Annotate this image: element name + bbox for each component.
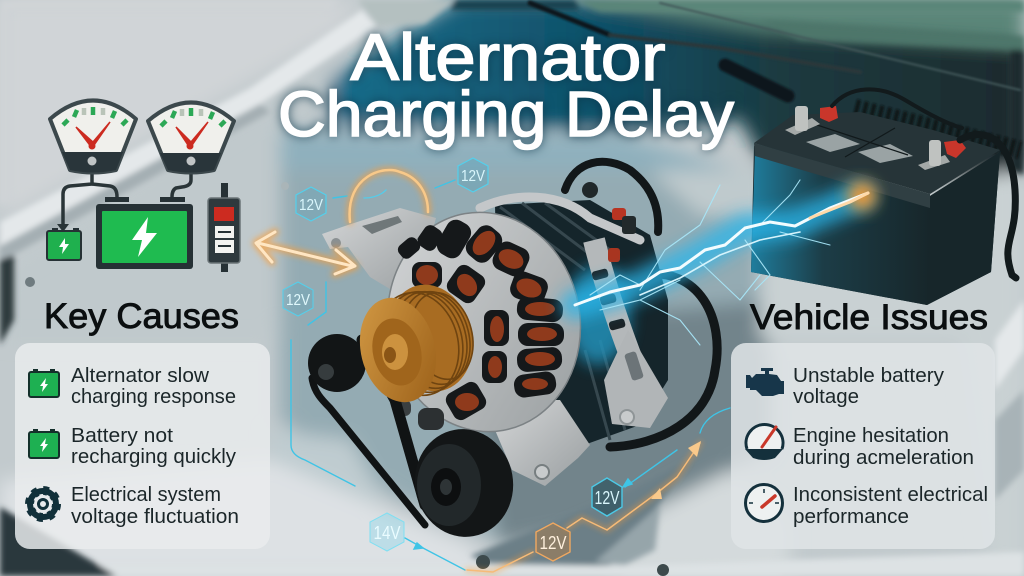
voltage tag: 12V orange: 12V [540, 533, 566, 553]
text: unstable battery: voltage [793, 386, 859, 408]
voltage tag: 12V lower [592, 478, 622, 516]
alternator [308, 162, 717, 545]
lower mount [495, 400, 590, 486]
voltage tag: 12V left side [283, 282, 313, 316]
small battery [47, 228, 81, 260]
wire arrowhead [57, 224, 69, 232]
red terminal caps [820, 106, 966, 158]
circular orange arrow [350, 170, 428, 222]
text: battery not: recharging quickly [71, 446, 236, 468]
body rivets [25, 182, 669, 576]
gauge two [148, 102, 234, 172]
voltage tag: 12V top left [296, 187, 326, 221]
icon: dashboard gauge [745, 424, 783, 460]
lower black pulley [406, 421, 522, 545]
fuse unit [208, 183, 240, 272]
mounting bracket [322, 208, 436, 292]
terminal: positive post [918, 140, 950, 170]
drive belt [312, 340, 425, 525]
text: alternator slow: Alternator slow [71, 365, 210, 387]
text: inconsistent electrical: performance [793, 506, 909, 528]
text: battery not: Battery not [71, 425, 173, 447]
double orange arrow [256, 232, 355, 274]
text: unstable battery: Unstable battery [793, 365, 944, 387]
icon: battery [29, 429, 59, 458]
rear silver band [591, 240, 668, 428]
circuit lines [291, 180, 730, 570]
alternator rear body [495, 200, 668, 450]
battery cables [832, 89, 1016, 278]
voltage tag: 14V [370, 513, 404, 551]
text: electrical system: Electrical system [71, 484, 221, 506]
icon: engine [746, 368, 784, 396]
icon: gear [30, 490, 56, 518]
voltage tag: 14V: 14V [374, 523, 400, 543]
front housing [370, 197, 598, 447]
system diagram icons [47, 100, 240, 272]
rear terminals [582, 182, 636, 262]
title: Alternator [350, 20, 666, 94]
copper pulley [349, 275, 484, 410]
text: inconsistent electrical: Inconsistent electrical [793, 484, 988, 506]
battery [751, 89, 1016, 305]
wires [63, 172, 191, 226]
black idler pulley [308, 334, 366, 392]
text: alternator slow: charging response [71, 386, 236, 408]
rear top band [480, 197, 640, 240]
icon: round gauge [746, 484, 782, 522]
title: Charging Delay [278, 78, 734, 150]
text: engine hesitation: during acmeleration [793, 447, 974, 469]
text: electrical system: voltage fluctuation [71, 506, 239, 528]
heading: vehicle issues: Vehicle Issues [750, 298, 988, 337]
voltage tag: 12V top left: 12V [299, 197, 323, 214]
ventilation slots [395, 216, 564, 430]
gauge one [50, 100, 136, 172]
voltage tag: 12V left side: 12V [286, 292, 310, 309]
panel: key causes [15, 343, 270, 549]
lightning bolt [575, 180, 876, 345]
voltage tag: 12V lower: 12V [594, 488, 620, 508]
orange rising voltage line [467, 441, 701, 572]
voltage tag: 12V orange [536, 523, 570, 561]
voltage tag: 12V top right [458, 158, 488, 192]
icon: battery [29, 369, 59, 397]
terminal: negative post [785, 106, 820, 135]
panel: vehicle issues [731, 343, 995, 549]
title [278, 20, 734, 150]
copper windings [416, 226, 557, 411]
wiper and cowl details [530, 3, 1020, 150]
alternator rear cable loop [565, 162, 717, 447]
voltage tag: 12V top right: 12V [461, 168, 485, 185]
large battery [96, 197, 193, 269]
heading: key causes: Key Causes [44, 297, 239, 336]
text: engine hesitation: Engine hesitation [793, 425, 949, 447]
